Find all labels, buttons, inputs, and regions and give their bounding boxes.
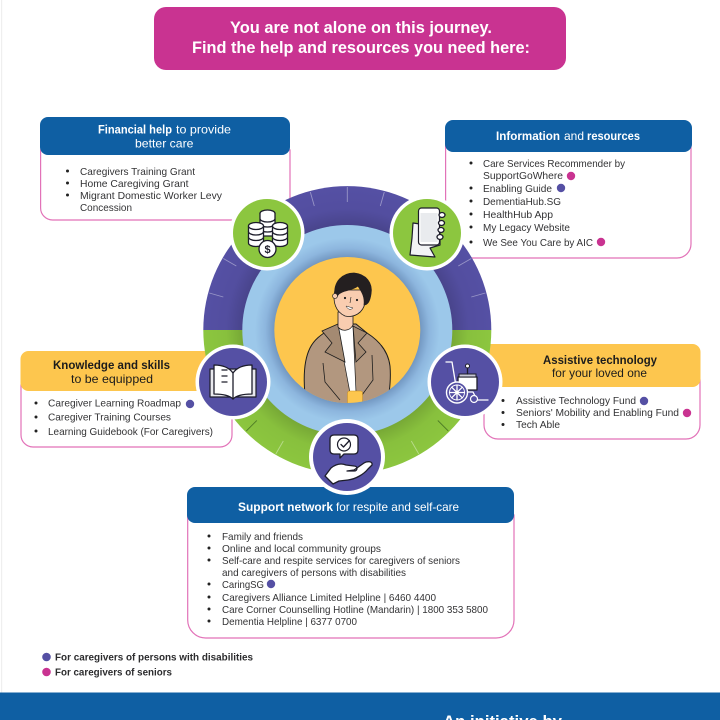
legend: For caregivers of seniors	[55, 668, 173, 678]
list: assistive items: Tech Able	[516, 420, 560, 431]
footer band	[0, 692, 720, 720]
icon: open book	[196, 344, 270, 420]
heading: financial help: to provide	[176, 122, 231, 136]
panel: support network	[187, 487, 514, 638]
ring: purple upper half	[203, 186, 491, 330]
heading: knowledge and skills: to be equipped	[71, 372, 153, 386]
list: information items: Enabling Guide	[483, 184, 552, 195]
list: knowledge items: Caregiver Learning Roadmap	[48, 398, 181, 410]
panel: assistive technology	[480, 344, 700, 439]
heading: support network: Support network	[238, 500, 333, 514]
list: knowledge items: Caregiver Training Courses	[48, 412, 171, 424]
icon: wheelchair	[428, 344, 502, 420]
heading: support network	[187, 487, 514, 523]
panel: financial help	[40, 117, 290, 220]
heading: assistive technology: for your loved one	[552, 366, 647, 380]
list: information items: HealthHub App	[483, 210, 553, 221]
list: knowledge items: Learning Guidebook (For Caregivers)	[48, 427, 213, 438]
list: financial help items	[66, 167, 223, 214]
list: knowledge items	[34, 398, 213, 438]
icon: hand holding phone	[390, 196, 464, 270]
list: support items	[208, 532, 488, 628]
list: financial help items: Home Caregiving Grant	[80, 179, 189, 190]
ring: green lower half	[203, 330, 491, 474]
heading: financial help	[40, 117, 290, 155]
list: information items: Care Services Recommender by	[483, 159, 626, 170]
list: support items: Family and friends	[222, 532, 303, 543]
list: support items: Care Corner Counselling Hotline (Mandarin) | 1800 353 5800	[222, 605, 488, 616]
list: support items: and caregivers of persons with disabilities	[222, 568, 406, 579]
list: financial help items: Concession	[80, 203, 132, 214]
list: information items: SupportGoWhere	[483, 171, 563, 182]
list: information items	[470, 159, 626, 249]
heading: knowledge and skills	[20, 351, 220, 391]
list: support items: Online and local community groups	[222, 544, 381, 555]
heading: information and resources: resources	[587, 129, 640, 143]
diagram: central ring with caregiver	[203, 186, 491, 474]
heading: financial help: Financial help	[98, 122, 172, 136]
heading: information and resources: and	[564, 129, 584, 143]
list: support items: CaringSG	[222, 580, 264, 591]
heading: assistive technology	[480, 344, 700, 387]
heading: information and resources	[445, 120, 692, 152]
list: information items: We See You Care by AIC	[483, 238, 593, 249]
heading: knowledge and skills: Knowledge and skills	[53, 358, 170, 372]
list: financial help items: Migrant Domestic Worker Levy	[80, 191, 223, 202]
icon: coins: $	[264, 244, 271, 256]
legend	[42, 652, 254, 678]
heading: assistive technology: Assistive technology	[543, 353, 657, 367]
panel: knowledge and skills	[20, 351, 232, 447]
list: financial help items: Caregivers Training Grant	[80, 167, 195, 178]
inner light blue circle	[242, 225, 452, 435]
heading: financial help: better care	[135, 136, 194, 150]
list: information items: DementiaHub.SG	[483, 197, 561, 208]
illustration: caregiver person	[304, 273, 390, 410]
list: support items: Caregivers Alliance Limited Helpline | 6460 4400	[222, 593, 436, 604]
title banner	[154, 7, 566, 70]
heading: information and resources: Information	[496, 129, 560, 143]
inner yellow circle	[274, 257, 420, 403]
icon: hand with check badge	[309, 419, 385, 495]
list: assistive items: Assistive Technology Fund	[516, 396, 636, 407]
list: support items: Dementia Helpline | 6377 0700	[222, 617, 357, 628]
legend: For caregivers of persons with disabilities	[55, 652, 254, 664]
icon: coins	[230, 196, 304, 270]
list: assistive items: Seniors' Mobility and Enabling Fund	[516, 408, 679, 419]
list: assistive items	[502, 396, 691, 431]
title banner: Find the help and resources you need here:	[192, 39, 530, 57]
panel: information and resources	[445, 120, 692, 258]
heading: support network: for respite and self-care	[336, 500, 459, 514]
list: information items: My Legacy Website	[483, 223, 570, 234]
title banner: You are not alone on this journey.	[230, 19, 492, 37]
list: support items: Self-care and respite services for caregivers of seniors	[222, 556, 460, 567]
